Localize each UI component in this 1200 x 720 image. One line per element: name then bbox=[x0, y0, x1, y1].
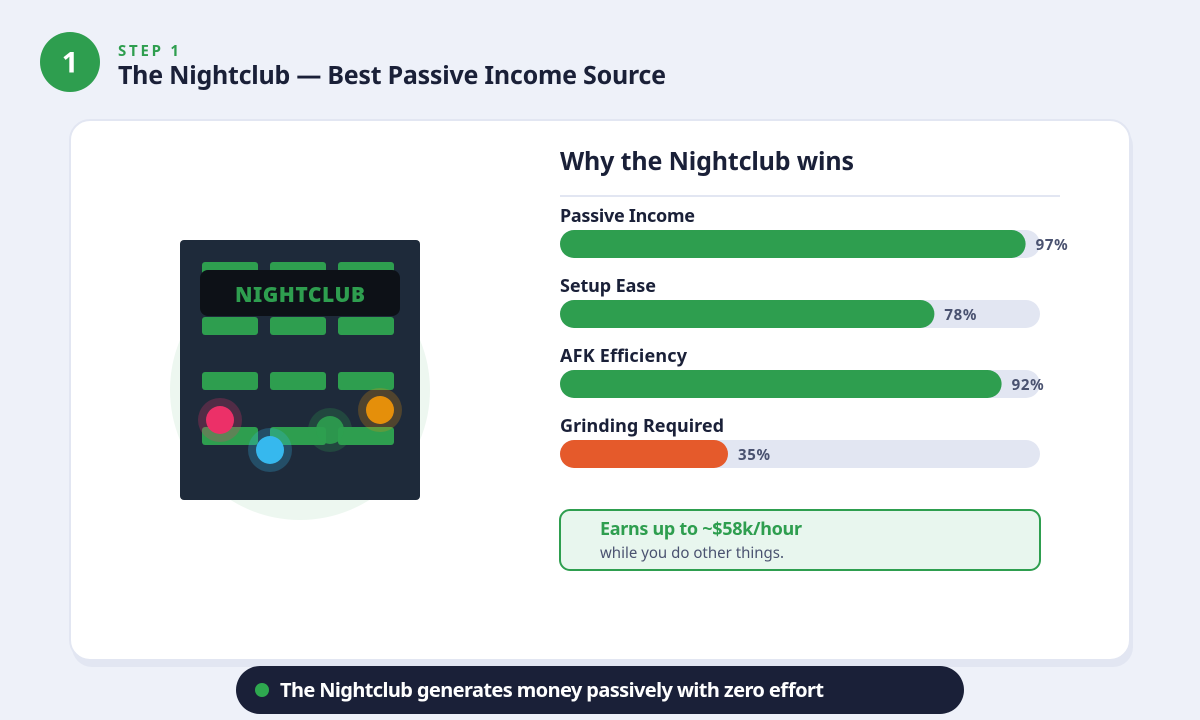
callout: earnings: while you do other things. bbox=[600, 543, 784, 563]
bar: passive income: 97% bbox=[1036, 235, 1068, 255]
step label: STEP 1 bbox=[118, 41, 179, 61]
bar chart: ratings bbox=[560, 204, 1068, 468]
title: The Nightclub — Best Passive Income Source bbox=[118, 58, 666, 92]
building bbox=[180, 240, 420, 500]
step number badge bbox=[40, 32, 100, 92]
bar: setup ease: 78% bbox=[944, 305, 977, 325]
bar: afk efficiency bbox=[560, 344, 1044, 398]
panel: main card bbox=[70, 120, 1133, 667]
bar: afk efficiency: 92% bbox=[1012, 375, 1044, 395]
callout: earnings: Earns up to ~$58k/hour bbox=[600, 517, 802, 541]
green light bbox=[308, 408, 352, 452]
windows bbox=[202, 262, 394, 445]
bar: passive income: Passive Income bbox=[560, 204, 695, 228]
callout: earnings bbox=[560, 510, 1040, 570]
bar: grinding required: 35% bbox=[738, 445, 770, 465]
background circle bbox=[170, 260, 430, 520]
neon sign bbox=[200, 270, 400, 316]
takeaway banner bbox=[236, 666, 964, 714]
illustration: nightclub building bbox=[170, 240, 430, 520]
bar: grinding required bbox=[560, 414, 1040, 468]
orange light bbox=[358, 388, 402, 432]
bar: passive income bbox=[560, 204, 1068, 258]
bar: setup ease bbox=[560, 274, 1040, 328]
bar: setup ease: Setup Ease bbox=[560, 274, 656, 298]
pink light bbox=[198, 398, 242, 442]
bar: grinding required: Grinding Required bbox=[560, 414, 724, 438]
step number badge: 1 bbox=[62, 42, 78, 82]
blue light bbox=[248, 428, 292, 472]
step header bbox=[40, 32, 666, 92]
neon sign: NIGHTCLUB bbox=[235, 281, 365, 309]
bar: afk efficiency: AFK Efficiency bbox=[560, 344, 688, 368]
takeaway banner: The Nightclub generates money passively with zero effort bbox=[280, 676, 824, 703]
heading: why the nightclub wins: Why the Nightclub wins bbox=[560, 144, 854, 178]
